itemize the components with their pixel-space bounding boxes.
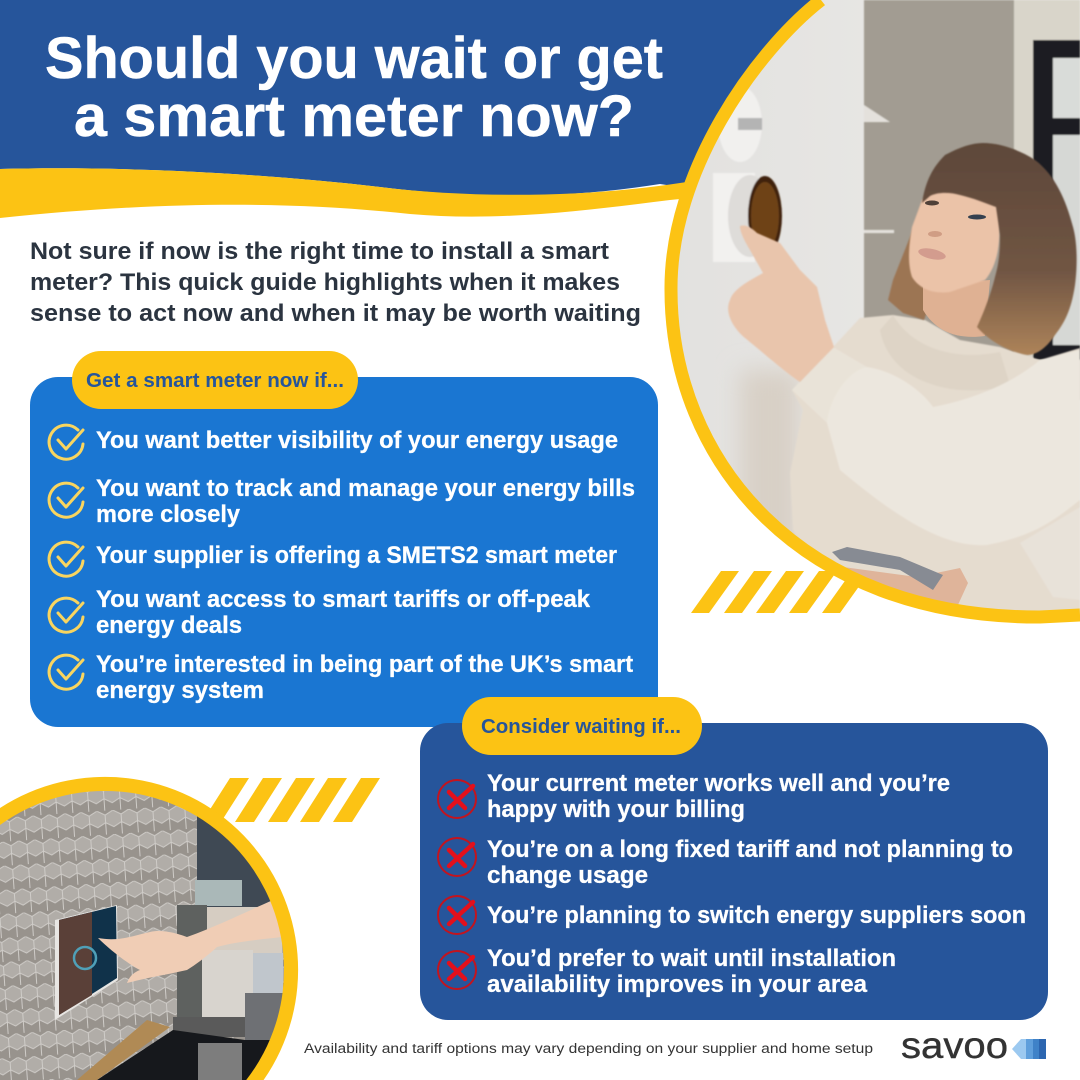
footnote: Availability and tariff options may vary depending on your supplier and home setup bbox=[304, 1041, 873, 1056]
stripes: upper right accent bbox=[691, 571, 870, 613]
blender bbox=[195, 880, 242, 906]
title bbox=[45, 26, 663, 149]
list: reasons to wait: Your current meter works well and you’re bbox=[487, 770, 950, 797]
pill heading: Consider waiting if... bbox=[481, 715, 681, 738]
list: reasons to get one now: You want access to smart tariffs or off-peak bbox=[96, 586, 591, 613]
list: reasons to wait: You’re planning to switch energy suppliers soon bbox=[487, 902, 1026, 929]
thermostat sensor bbox=[718, 86, 762, 162]
lips bbox=[918, 248, 946, 260]
nose shadow bbox=[928, 231, 942, 237]
face bbox=[909, 185, 999, 292]
logo: savoo bbox=[901, 1025, 1046, 1066]
arm bbox=[98, 900, 282, 983]
icons: red cross circles bbox=[438, 780, 476, 989]
back wall bbox=[863, 0, 1015, 352]
hair left lobe bbox=[888, 232, 926, 320]
thermostat plate bbox=[713, 173, 755, 262]
hair bbox=[922, 143, 1077, 355]
tablet bbox=[55, 905, 118, 1020]
list: reasons to wait: happy with your billing bbox=[487, 796, 745, 823]
photo: woman adjusting thermostat bbox=[660, 0, 1080, 625]
coffee machine bbox=[177, 905, 207, 1017]
icons: yellow check circles bbox=[49, 425, 83, 689]
photo: tablet in kitchen bbox=[0, 777, 300, 1080]
wall shadow bbox=[740, 370, 800, 560]
phone bbox=[832, 547, 943, 590]
panel: consider waiting bbox=[420, 697, 1048, 1020]
list: reasons to get one now: energy system bbox=[96, 677, 264, 704]
lower right body bbox=[1020, 507, 1080, 600]
pill heading: Get a smart meter now if... bbox=[86, 369, 344, 392]
cuff bbox=[794, 349, 863, 420]
list: reasons to get one now: You want better visibility of your energy usage bbox=[96, 427, 618, 454]
list: reasons to get one now: more closely bbox=[96, 501, 241, 528]
collar bbox=[880, 315, 1010, 390]
yellow ring bbox=[0, 777, 298, 1080]
panel: get a smart meter now bbox=[30, 351, 658, 727]
sweater bbox=[790, 315, 1080, 625]
intro text: Not sure if now is the right time to install a smart bbox=[30, 238, 609, 265]
counter bbox=[97, 1030, 270, 1080]
eyes and brow shadow bbox=[925, 200, 986, 220]
list: reasons to wait: availability improves in your area bbox=[487, 971, 868, 998]
list: reasons to get one now: Your supplier is offering a SMETS2 smart meter bbox=[96, 542, 617, 569]
phone hand bbox=[843, 567, 968, 607]
list: reasons to get one now: You want to track and manage your energy bills bbox=[96, 475, 635, 502]
yellow wave bbox=[0, 168, 700, 218]
title: a smart meter now? bbox=[74, 84, 634, 149]
list: reasons to wait bbox=[487, 770, 1026, 998]
title: Should you wait or get bbox=[45, 26, 663, 91]
intro text: sense to act now and when it may be worth waiting bbox=[30, 300, 641, 327]
header banner bbox=[0, 0, 830, 218]
icon: blue tag bbox=[1012, 1039, 1046, 1059]
list: reasons to get one now bbox=[96, 427, 635, 704]
list: reasons to wait: change usage bbox=[487, 862, 648, 889]
yellow ring bbox=[671, 0, 1080, 617]
raised sleeve bbox=[827, 350, 1080, 545]
list: reasons to get one now: energy deals bbox=[96, 612, 242, 639]
hand bbox=[728, 225, 834, 382]
intro text bbox=[30, 238, 641, 327]
logo: savoo: savoo bbox=[901, 1025, 1008, 1066]
gauge bbox=[74, 947, 96, 969]
pill heading bbox=[72, 351, 358, 409]
list: reasons to wait: You’re on a long fixed tariff and not planning to bbox=[487, 836, 1013, 863]
neck bbox=[923, 280, 990, 337]
pill heading bbox=[462, 697, 702, 755]
intro text: meter? This quick guide highlights when it makes bbox=[30, 269, 620, 296]
list: reasons to wait: You’d prefer to wait until installation bbox=[487, 945, 896, 972]
stripes: lower left accent bbox=[202, 778, 380, 822]
dark wall bbox=[197, 816, 270, 907]
list: reasons to get one now: You’re interested in being part of the UK’s smart bbox=[96, 651, 633, 678]
